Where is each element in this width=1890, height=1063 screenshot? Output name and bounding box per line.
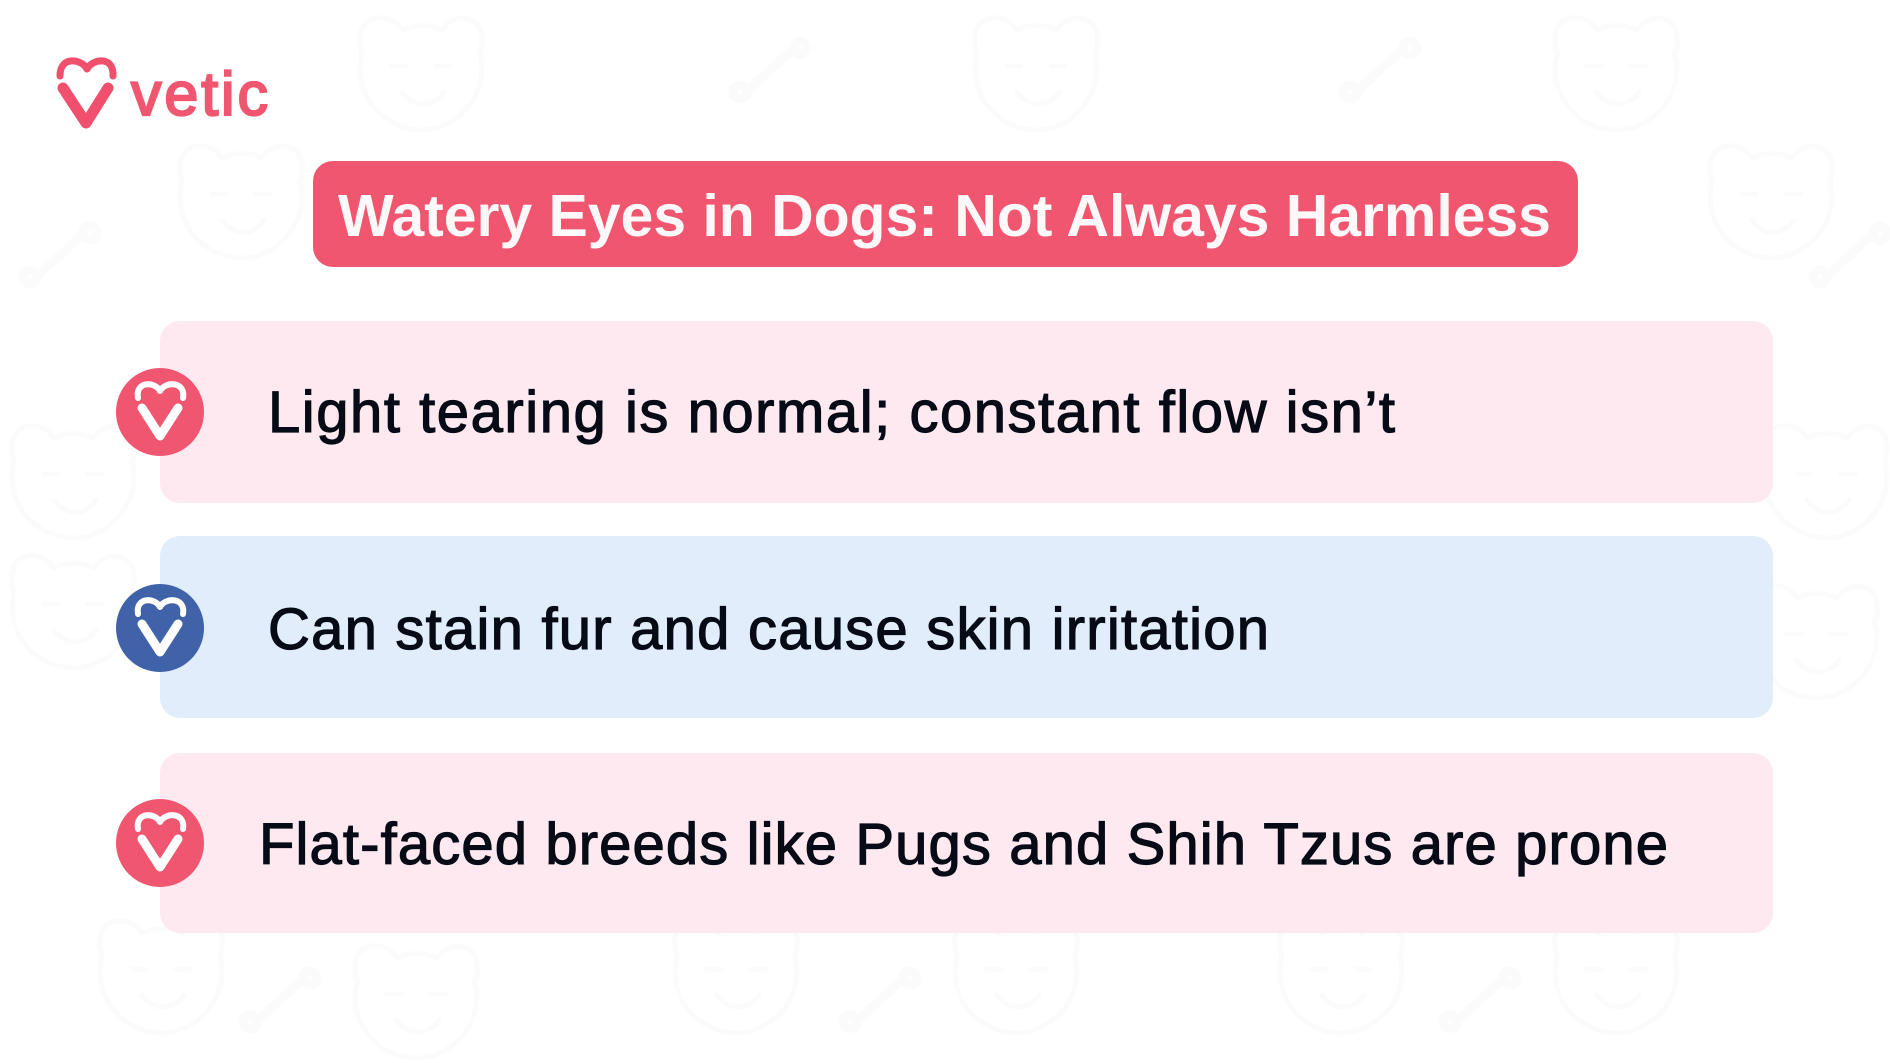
panel: light tearing: [116, 321, 1773, 503]
panel text: Light tearing is normal; constant flow isn’t: [268, 380, 1395, 445]
icon: blue vetic badge: [116, 584, 204, 672]
icon: pink vetic badge: [116, 368, 204, 456]
panel: stain fur: [116, 536, 1773, 718]
title banner: [313, 161, 1578, 267]
panel text: Can stain fur and cause skin irritation: [268, 597, 1269, 662]
icon: pink vetic badge: [116, 799, 204, 887]
icon: vetic heart mark: [60, 61, 113, 123]
logo: vetic: [60, 60, 268, 128]
panel: flat-faced breeds: [116, 753, 1773, 933]
logo wordmark: vetic: [131, 60, 268, 128]
title text: Watery Eyes in Dogs: Not Always Harmless: [338, 183, 1551, 249]
panel text: Flat-faced breeds like Pugs and Shih Tzus are prone: [259, 812, 1668, 877]
